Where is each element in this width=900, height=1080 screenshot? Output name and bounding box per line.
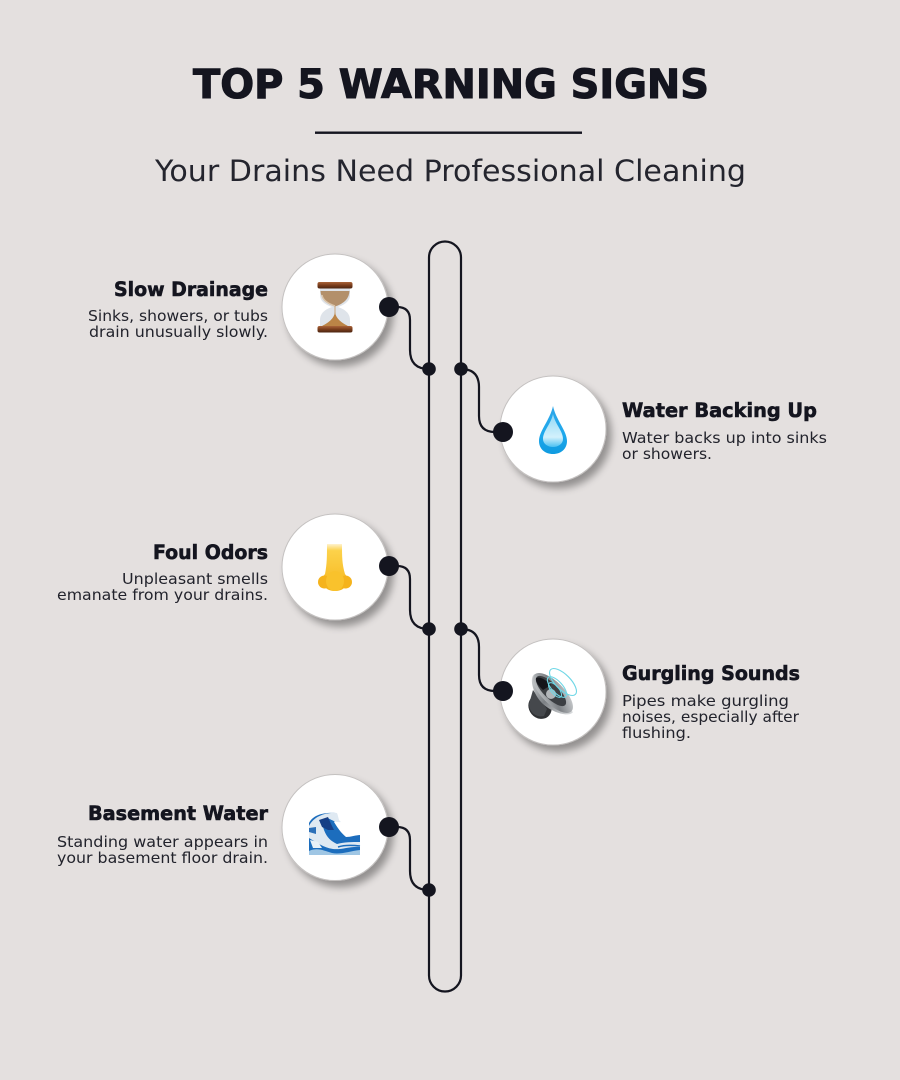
central pipe [429,242,461,992]
description: Unpleasant smells [122,570,268,588]
description [622,692,800,742]
heading: Water Backing Up [622,399,817,422]
item: Basement Water [57,774,436,897]
icon: speaker [524,664,581,724]
heading: Foul Odors [153,541,268,564]
item: Foul Odors [57,514,436,636]
description: Standing water appears in [57,833,268,851]
heading: Slow Drainage [114,278,268,301]
icon circle: wave [282,774,388,880]
description: emanate from your drains. [57,586,268,604]
description: noises, especially after [622,708,800,726]
connector: Water Backing Up [461,369,503,432]
description: your basement floor drain. [57,849,268,867]
description [57,570,268,604]
icon circle: water drop [500,376,606,482]
description [622,429,827,463]
heading: Basement Water [88,802,268,825]
connector: Basement Water [389,827,429,890]
icon: nose [318,544,352,591]
icon circle: nose [282,514,388,620]
description: Water backs up into sinks [622,429,827,447]
item: Slow Drainage [88,254,436,376]
title divider [315,132,582,134]
description [57,833,268,867]
icon: wave [309,813,360,855]
pipe junction [422,622,436,636]
connector dot [493,422,513,442]
description [88,307,268,341]
description: flushing. [622,724,691,742]
icon: water drop [539,406,567,454]
description: or showers. [622,445,712,463]
icon circle: speaker [500,639,606,745]
connector dot [379,297,399,317]
icon: hourglass [318,282,352,332]
connector dot [379,817,399,837]
connector: Gurgling Sounds [461,629,503,691]
connector dot [493,681,513,701]
pipe junction [422,883,436,897]
heading: Gurgling Sounds [622,662,800,685]
pipe junction [422,362,436,376]
pipe junction [454,622,468,636]
subtitle: Your Drains Need Professional Cleaning [154,154,746,188]
item: Water Backing Up [454,362,827,482]
connector dot [379,556,399,576]
title: TOP 5 WARNING SIGNS [193,62,709,108]
description: Sinks, showers, or tubs [88,307,268,325]
item: Gurgling Sounds [454,622,800,745]
connector: Slow Drainage [389,307,429,369]
description: drain unusually slowly. [89,323,268,341]
pipe junction [454,362,468,376]
connector: Foul Odors [389,566,429,629]
icon circle: hourglass [282,254,388,360]
description: Pipes make gurgling [622,692,789,710]
